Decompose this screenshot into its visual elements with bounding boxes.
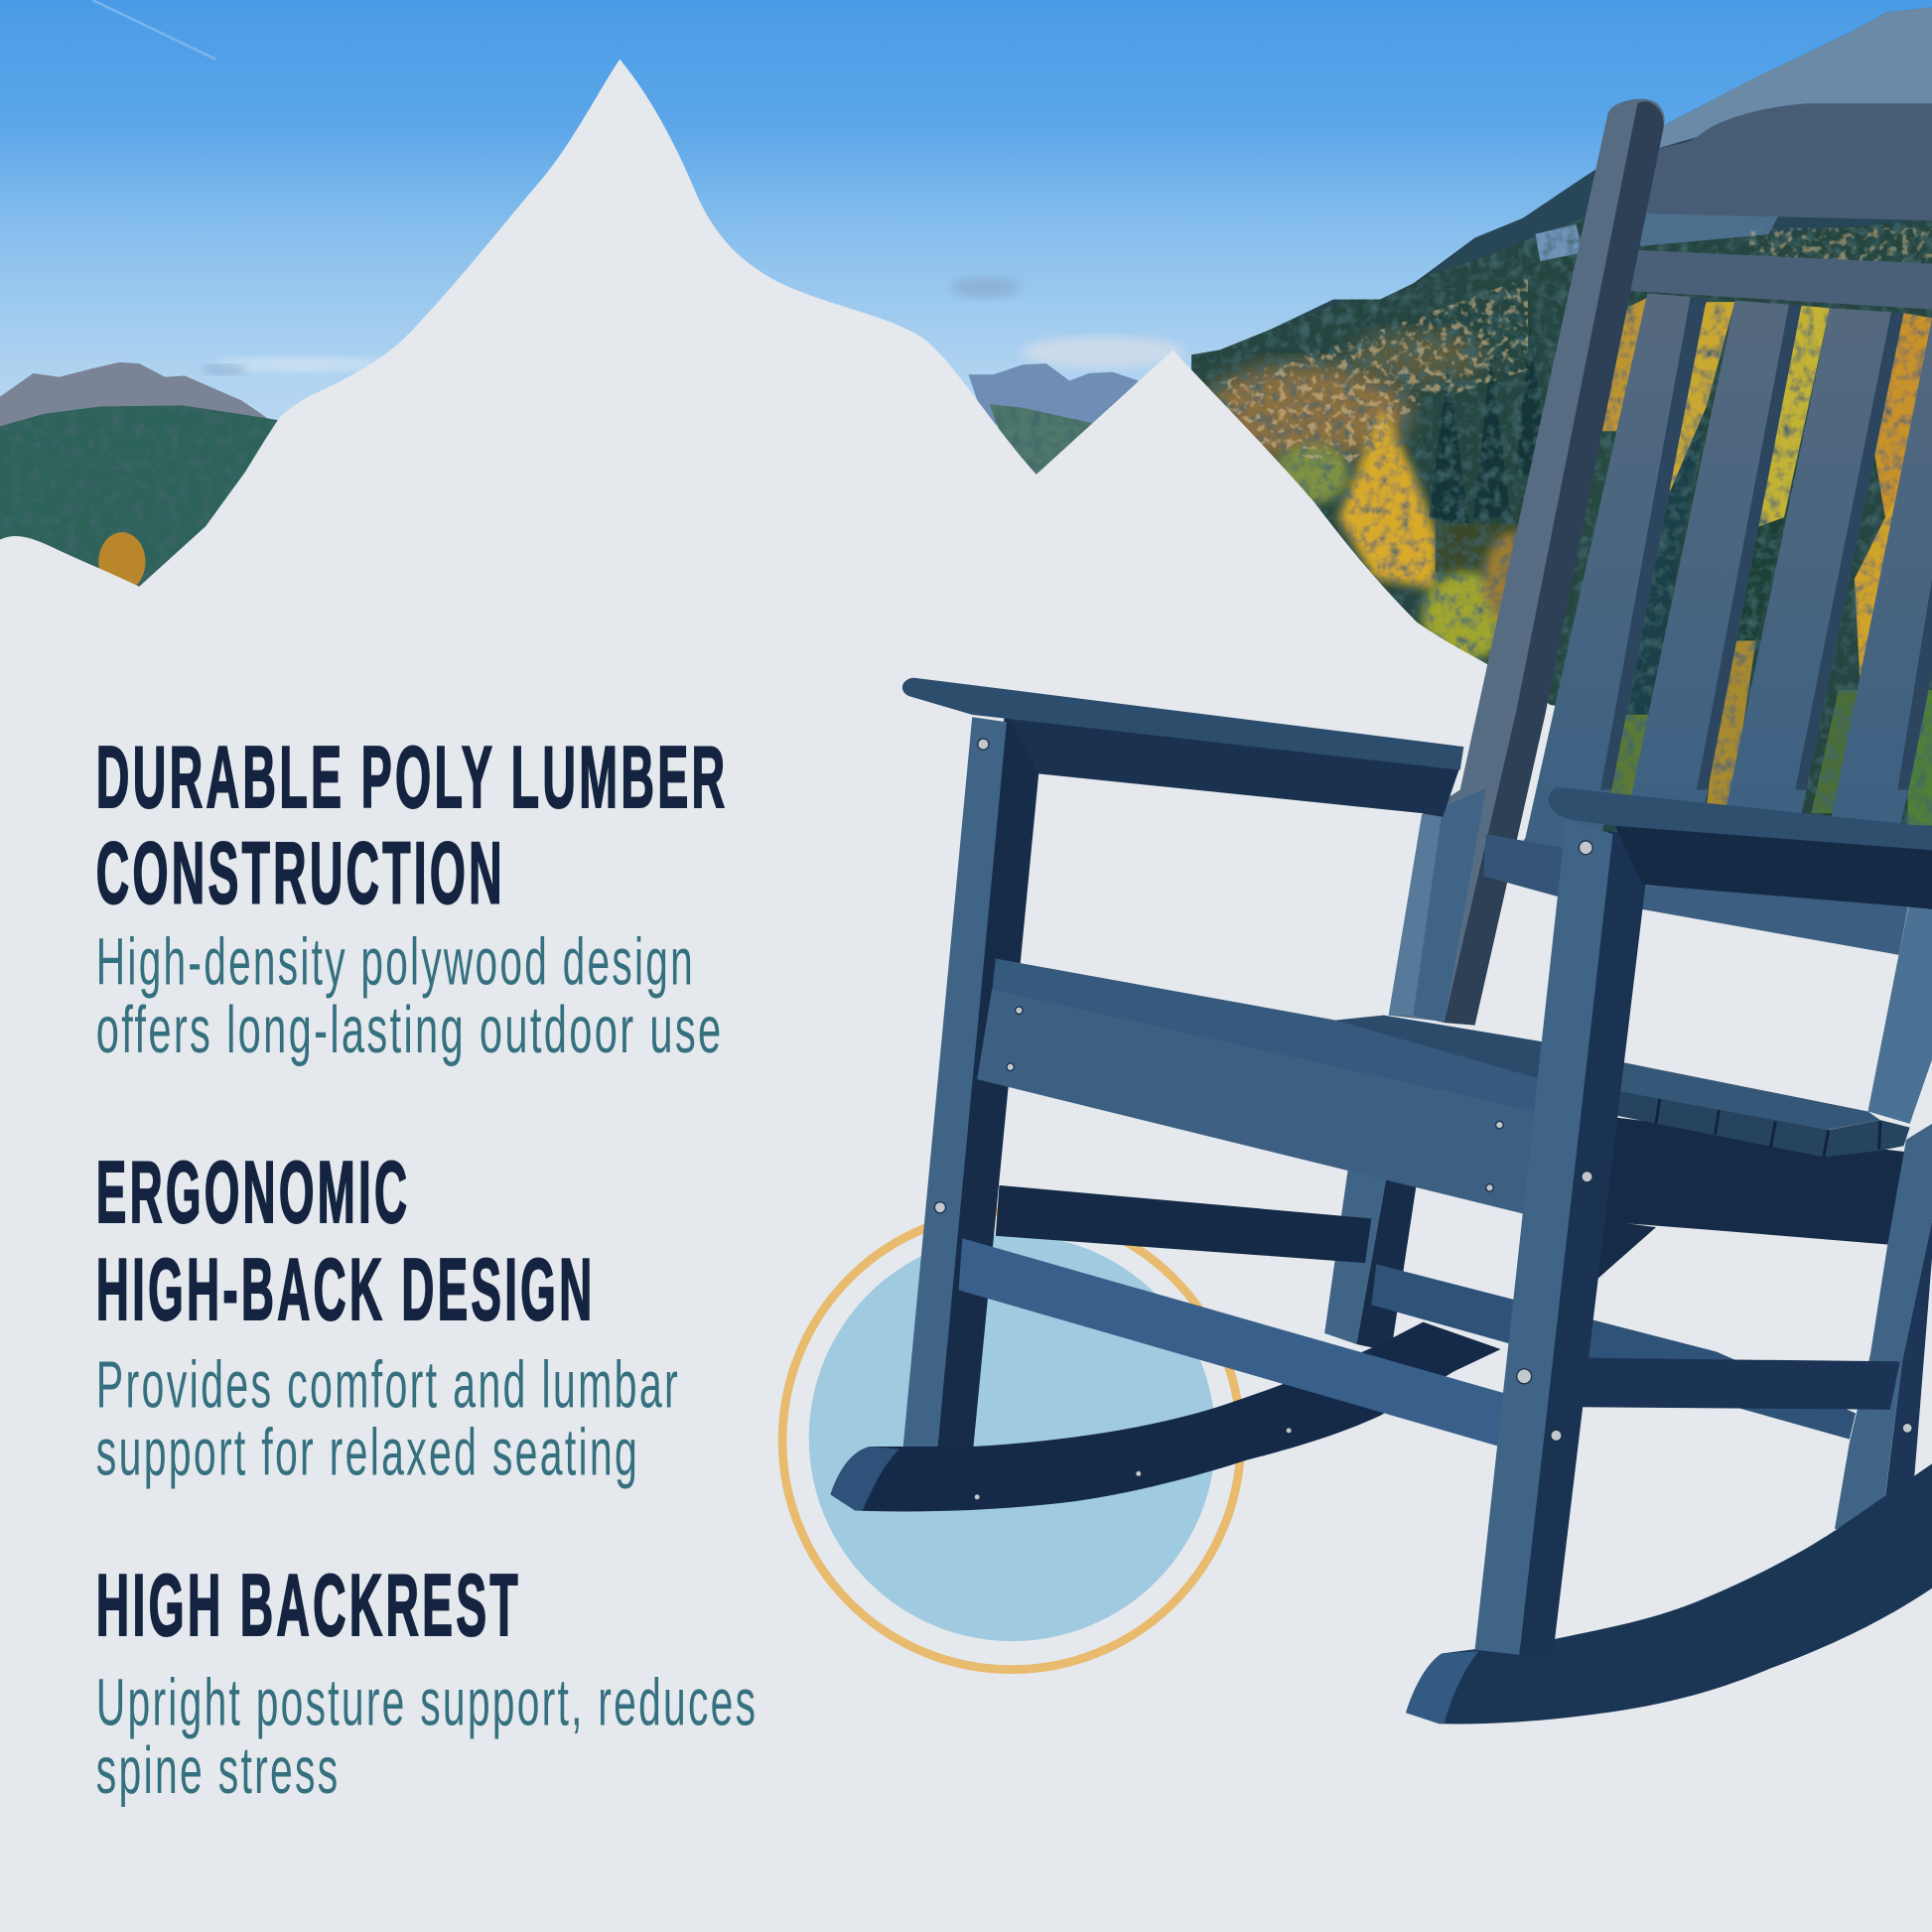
body: high backrest: spine stress — [96, 1733, 341, 1808]
chair: rear back rail, left — [1483, 834, 1571, 899]
heading: high backrest: HIGH BACKREST — [96, 1556, 521, 1654]
body: durable poly lumber: offers long-lasting outdoor use — [96, 993, 724, 1067]
blue circle accent — [809, 1235, 1215, 1641]
forest colours — [1191, 215, 1932, 888]
chair: seat deck — [1601, 1057, 1880, 1130]
feature: durable poly lumber — [96, 728, 728, 1067]
orange larch speckle — [1220, 277, 1528, 469]
chair: left armrest — [902, 678, 1463, 770]
body: ergonomic high-back design — [96, 1347, 680, 1490]
chair: screws — [934, 739, 1912, 1500]
chair: seat deck near side — [1335, 1016, 1547, 1079]
gold ring accent — [782, 1211, 1241, 1670]
chair: right front post — [1475, 819, 1651, 1658]
chair: left stile — [1389, 99, 1665, 1026]
chair: left armrest under-band — [1007, 715, 1460, 817]
feature: high backrest — [96, 1556, 758, 1808]
chair: lower stile facets — [1389, 788, 1486, 1023]
chair: seat slat ends — [1601, 1088, 1910, 1157]
forest mountain, right — [1182, 0, 1932, 888]
chair: right armrest — [1548, 787, 1932, 850]
body: durable poly lumber — [96, 925, 724, 1067]
clouds — [92, 0, 1184, 374]
heading: durable poly lumber construction: CONSTRUCTION — [96, 824, 505, 922]
body: ergonomic high-back design: Provides comfort and lumbar — [96, 1347, 680, 1422]
chair: arm under-band — [1614, 823, 1932, 909]
chair: right rocker — [1406, 1463, 1932, 1724]
chair: under-seat shadow block — [1595, 1115, 1907, 1244]
chair: crest rail — [1629, 103, 1932, 220]
chair: second back rail — [1608, 249, 1932, 310]
rocking chair — [830, 99, 1932, 1724]
chair: right lower stretcher — [1579, 1358, 1900, 1410]
body: high backrest: Upright posture support, reduces — [96, 1665, 758, 1739]
chair: dark side stretcher — [996, 1185, 1371, 1263]
chair: right rocker tip — [1406, 1651, 1478, 1724]
distant mountains, centre — [968, 363, 1139, 486]
body: durable poly lumber: High-density polywood design — [96, 925, 695, 1000]
body: high backrest — [96, 1666, 758, 1808]
chair: seat side rail top strip — [992, 959, 1547, 1115]
distant mountains, left — [0, 362, 283, 592]
chair: rear cross stretcher — [1371, 1264, 1856, 1440]
chair: seat side rail face — [977, 990, 1540, 1215]
heading: ergonomic high-back design: HIGH-BACK DESIGN — [96, 1240, 595, 1338]
heading: durable poly lumber construction: DURABLE POLY LUMBER — [96, 728, 728, 826]
rock patch below crest — [1640, 213, 1778, 246]
feature: ergonomic high-back design — [96, 1143, 680, 1490]
chair: back slats — [1509, 293, 1932, 863]
chair: far arm post upper — [1867, 906, 1932, 1124]
chair: rear leg below seat — [1324, 1152, 1420, 1351]
rocky summit — [1651, 5, 1932, 150]
chair: left front post — [903, 717, 1044, 1447]
heading: durable poly lumber construction — [96, 728, 728, 922]
chair: rear back rail, centre — [1635, 885, 1908, 955]
heading: ergonomic high-back design: ERGONOMIC — [96, 1143, 410, 1241]
chair: left rocker tip — [830, 1447, 899, 1511]
heading: ergonomic high-back design — [96, 1143, 595, 1338]
body: ergonomic high-back design: support for relaxed seating — [96, 1416, 639, 1490]
chair: lower right rear leg — [1835, 1124, 1932, 1529]
chair: under-seat brace — [1593, 1220, 1656, 1283]
sky background — [0, 0, 1932, 763]
chair: light side stretcher — [959, 1238, 1506, 1447]
chair: left rocker — [830, 1322, 1501, 1511]
